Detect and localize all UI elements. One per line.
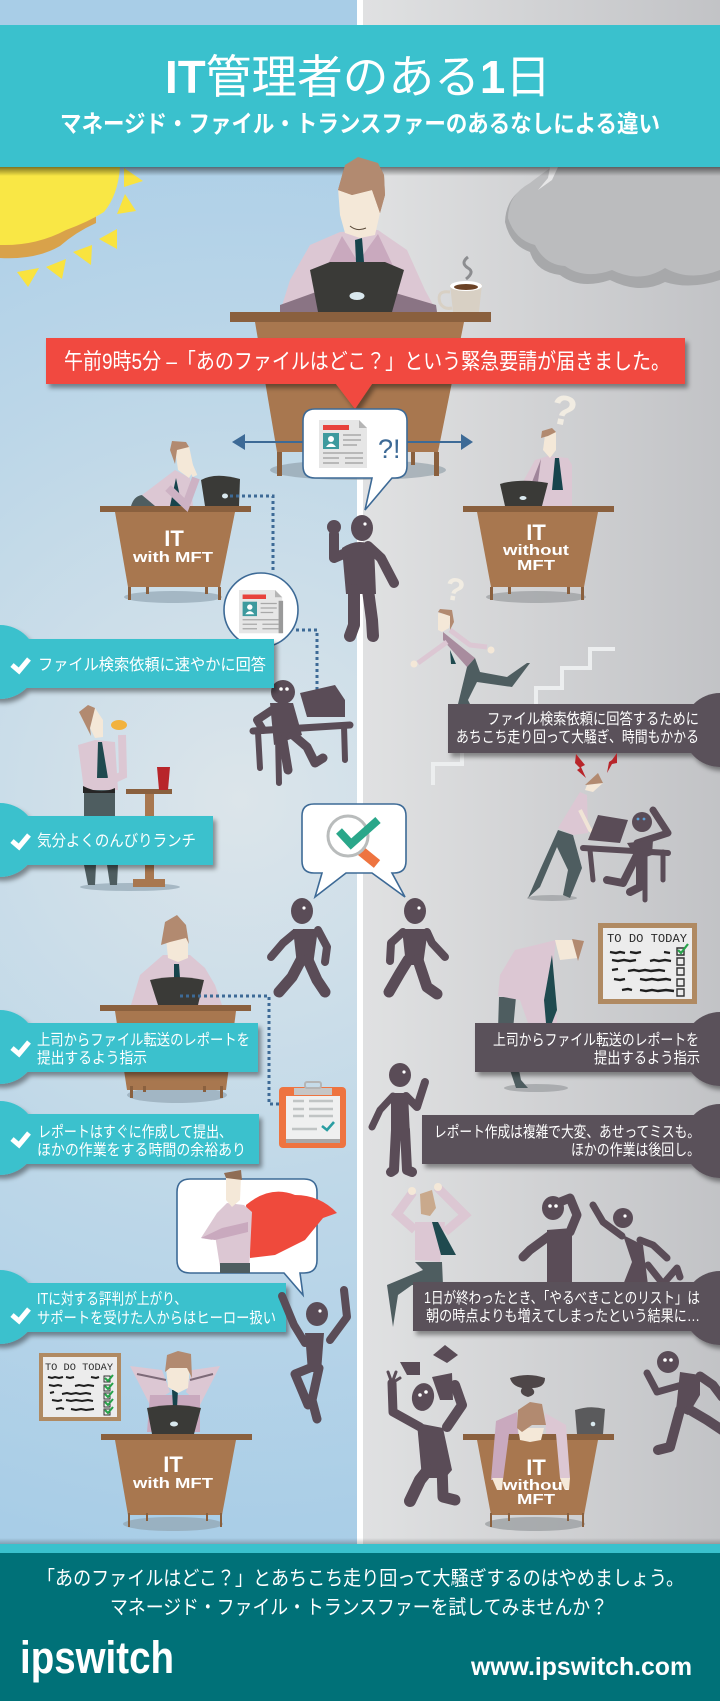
figure: relaxed man at desk [131,441,240,506]
label: IT without MFT: IT [526,520,546,545]
icon: magnifier with check [328,816,378,864]
lunch table [126,789,172,887]
icon: coffee cup [439,257,482,312]
hero man with cape [201,1170,337,1273]
panel label: leisurely lunch [0,803,213,877]
panel label: report done quickly [0,1101,259,1175]
icon: to do board, all checked: TO DO TODAY [45,1362,114,1374]
icon: exhaustion smoke cloud [510,1375,545,1397]
icon: document circle [224,573,298,647]
figure: slumped man at desk [463,1402,614,1531]
label: IT with MFT: with MFT [132,549,213,566]
label: IT without MFT [502,1455,569,1508]
logo: ipswitch: ipswitch [20,1632,174,1683]
desk: IT with MFT morning [100,506,251,603]
label: IT with MFT: IT [163,1452,183,1477]
panel label: hero treatment [0,1270,286,1344]
decorative: stairs [536,649,615,704]
icon: sun [0,167,143,287]
figure: central IT manager at desk [230,157,491,480]
desk: IT without MFT morning [463,506,614,603]
footer [0,1538,720,1701]
silhouette: colleague throwing papers [388,1345,462,1501]
label: IT with MFT: IT [164,526,184,551]
subtitle: マネージド・ファイル・トランスファーのあるなしによる違い [60,111,660,138]
background: without MFT side [363,0,720,1545]
icon: to do board, all checked [39,1353,121,1421]
panel label: report done quickly: ほかの作業をする時間の余裕あり [37,1141,246,1159]
silhouette: colleague on phone [327,515,394,636]
icon: clipboard [279,1082,346,1148]
label: IT without MFT: MFT [517,557,555,574]
panel label: respond quickly [0,625,274,699]
silhouette: walking colleague right [389,898,445,994]
figure: lunch man [78,705,180,891]
label: IT without MFT [502,520,569,574]
figure: panicked man [387,1183,465,1327]
desk shadow [270,460,446,480]
website URL: www.ipswitch.com [470,1653,692,1681]
arrow: left to with MFT [232,434,306,450]
figure: bowed exhausted man [498,939,584,1092]
silhouette: jumping colleague [282,1290,347,1419]
background: with MFT side [0,0,357,1545]
silhouette: colleague scratching head [523,1196,577,1285]
speech bubble: where's the file [303,409,407,510]
label: IT with MFT [132,1452,213,1492]
dotted connector: laptop to document [230,496,273,573]
panel label: boss asks for a report [0,1010,258,1084]
figure: running man [410,570,530,704]
silhouette: colleague with desk [583,810,668,900]
?! text: ?! [378,434,401,464]
question mark: ? [546,385,581,436]
label: IT without MFT: without [502,542,569,559]
icon: to do board, one checked: TO DO TODAY [607,932,687,946]
figure: relaxed man, end of day [101,1351,252,1531]
drink [157,767,170,790]
silhouette: colleague running away [647,1351,720,1450]
label: IT without MFT: without [502,1477,569,1494]
arrow: right to without MFT [405,434,473,450]
panel label: report done quickly: レポートはすぐに作成して提出、 [38,1123,232,1141]
man head [338,157,385,238]
silhouette: colleague at desk [253,680,350,783]
call to action [37,1567,684,1619]
panel label: leisurely lunch: 気分よくのんびりランチ [37,832,196,850]
panel label: running around [448,693,720,767]
silhouette: colleague waving [593,1205,680,1285]
label: IT with MFT: with MFT [132,1475,213,1492]
icon: lightning bolts [575,753,617,778]
silhouette: walking colleague left [271,898,327,992]
panel label: to-do list grew [413,1271,720,1345]
figure: man pushing desk [527,773,607,901]
man torso [280,230,437,312]
dotted connector: laptop to clipboard [180,996,280,1104]
panel label: respond quickly: ファイル検索依頼に速やかに回答 [38,656,266,674]
laptop [310,262,404,312]
label: IT without MFT: IT [526,1455,546,1480]
title: IT管理者のある1日 [165,51,551,103]
figure: confused man at desk [500,385,581,506]
icon: document [319,420,367,468]
desk [230,312,491,476]
man's head overlapping header [338,157,385,213]
label: IT without MFT: MFT [517,1491,555,1508]
panel label: boss asks for a report: 提出するよう指示 [37,1049,147,1067]
figure: running man: ? [442,570,468,609]
panel label: hero treatment: サポートを受けた人からはヒーロー扱い [37,1309,276,1327]
panel label: boss asks for a report: 上司からファイル転送のレポートを [37,1031,250,1049]
figure: man at desk, afternoon [100,915,251,1103]
panel label: report complicated [422,1104,720,1178]
label: IT with MFT [132,526,213,566]
icon: to do board, one checked [598,923,697,1004]
speech bubble: search solved [302,804,406,897]
header band [0,25,720,176]
call to action: マネージド・ファイル・トランスファーを試してみませんか？ [110,1596,608,1619]
silhouette: colleague on phone, right [372,1063,425,1172]
icon: storm cloud [505,167,720,288]
callout: red banner [46,338,685,409]
dotted connector: document to colleague [296,630,317,690]
panel label: boss asks, without MFT: 提出するよう指示 [594,1049,700,1067]
panel label: boss asks, without MFT [475,1012,720,1086]
panel label: hero treatment: ITに対する評判が上がり、 [37,1290,187,1308]
speech bubble: hero [177,1170,337,1295]
